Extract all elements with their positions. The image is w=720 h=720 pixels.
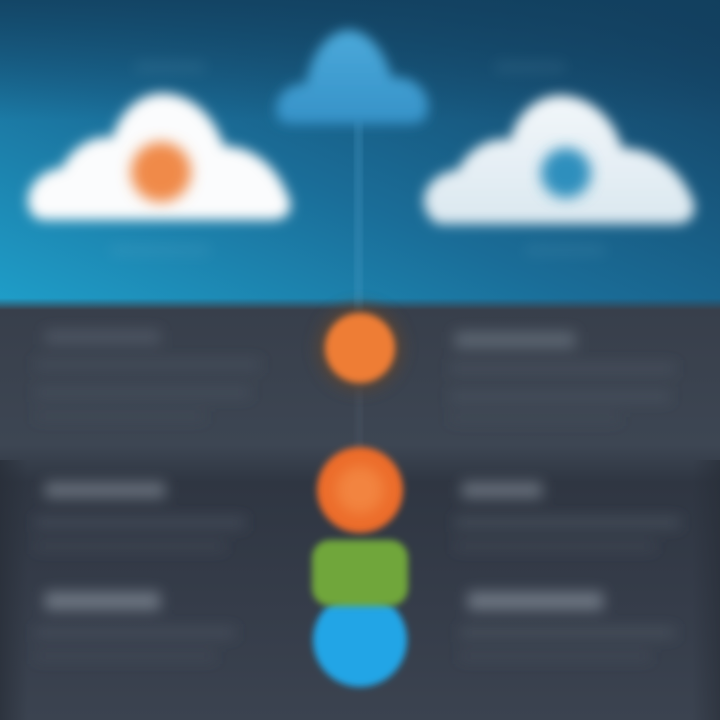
- icon: blue circle bottom: [313, 593, 407, 687]
- cloud: left white with orange core: [28, 93, 290, 220]
- text block: upper left: [35, 330, 260, 420]
- icon: green rounded block: [312, 540, 408, 606]
- text block: middle left: [35, 482, 245, 550]
- right cloud blue core: [541, 148, 591, 198]
- upper sky panel: [0, 0, 720, 310]
- icon: orange circle upper: [316, 304, 404, 392]
- lower dark panel: [0, 298, 720, 720]
- left cloud body: [28, 93, 290, 220]
- center connector line: [355, 120, 362, 450]
- text block: middle right: [455, 482, 680, 550]
- left cloud orange core: [131, 142, 191, 202]
- faint labels around clouds: [110, 62, 605, 255]
- cloud: center blue: [276, 30, 428, 124]
- cloud: right pale with blue core: [424, 95, 694, 224]
- icon: orange circle lower: [317, 447, 403, 533]
- text block: upper right: [450, 332, 675, 422]
- right cloud body: [424, 95, 694, 224]
- text block: lower left: [35, 592, 235, 660]
- text block: lower right: [460, 592, 675, 660]
